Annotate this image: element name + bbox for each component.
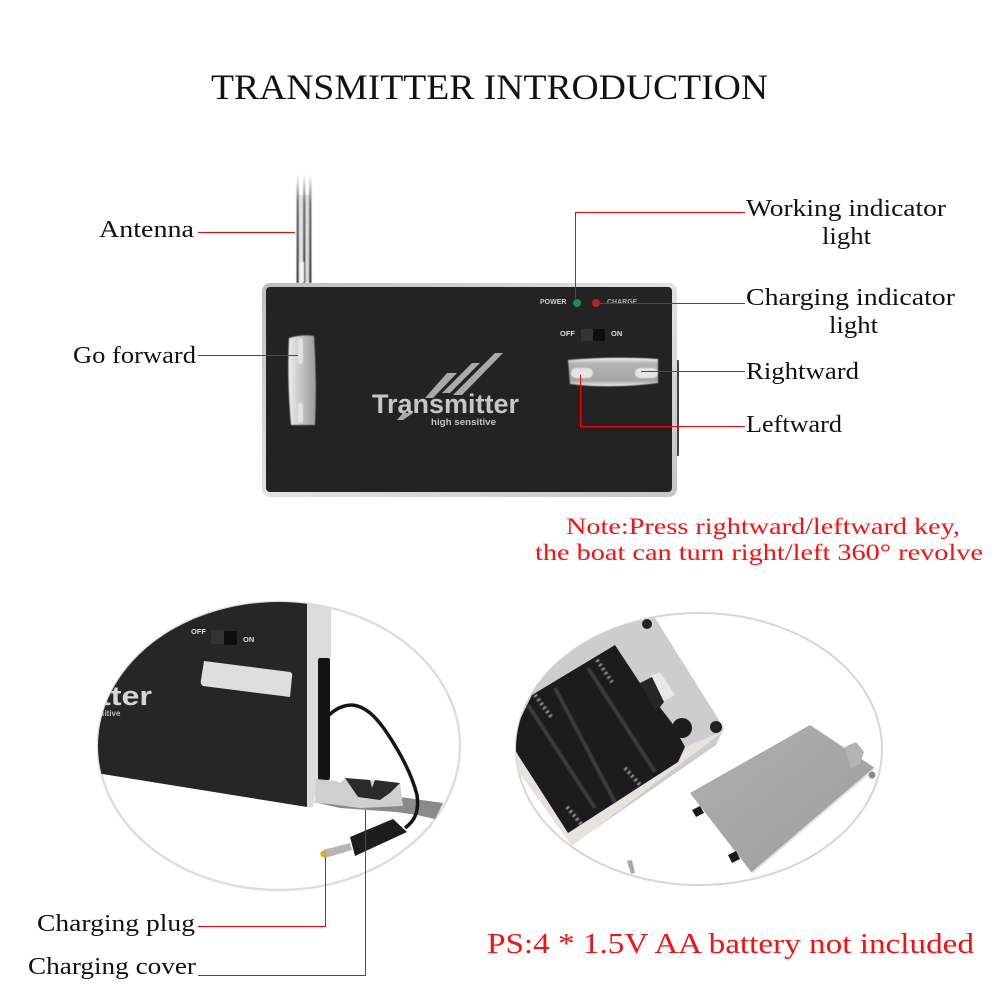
indicator labels: POWER [540, 299, 566, 306]
plug pin [323, 843, 352, 858]
power switch [560, 329, 622, 341]
note: Note:Press rightward/leftward key, [566, 514, 960, 539]
black face [90, 590, 307, 807]
loose screw [627, 860, 635, 874]
bay screw mount [672, 718, 692, 738]
leader line: working light [576, 212, 745, 300]
label: working indicator light [746, 196, 946, 250]
note: the boat can turn right/left 360° revolve [535, 540, 983, 565]
logo stripes [397, 353, 503, 420]
indicator labels [540, 299, 638, 307]
logo fragment: tter [100, 681, 153, 711]
transmitter front view [262, 175, 679, 497]
cover clips [692, 806, 740, 863]
leader line: antenna [198, 232, 295, 234]
side button [675, 360, 679, 456]
label: charging indicator light: Charging indicator [746, 285, 955, 311]
lower edge [510, 731, 724, 846]
battery bay [510, 645, 685, 833]
cover rim [752, 768, 875, 873]
device body [262, 283, 677, 497]
power switch: ON [611, 329, 622, 338]
port cavity [345, 778, 400, 800]
panel: battery compartment detail [510, 613, 882, 885]
port housing [315, 778, 403, 808]
logo subtitle: high sensitive [431, 417, 496, 428]
ellipse outline [98, 602, 460, 890]
label: antenna: Antenna [99, 217, 194, 243]
battery note: PS:4 * 1.5V AA battery not included [487, 929, 974, 960]
switch [640, 677, 664, 712]
leader line: rightward [641, 370, 745, 372]
logo text: Transmitter [372, 389, 519, 419]
label: charging indicator light [746, 285, 955, 339]
logo subtitle fragment: sitive [100, 709, 121, 718]
silver side [307, 600, 331, 807]
note [535, 514, 983, 565]
port plate [313, 797, 443, 819]
spring contacts [535, 660, 640, 825]
label: charging plug: Charging plug [37, 911, 195, 937]
side slot [318, 658, 330, 780]
power switch [191, 629, 254, 645]
plug tip [320, 851, 327, 857]
bay ridges [528, 668, 655, 808]
cable [320, 705, 418, 828]
key [201, 661, 292, 697]
corner screw [710, 721, 722, 733]
left and right key [568, 358, 658, 386]
label: charging indicator light: light [829, 313, 878, 339]
silver back [515, 618, 724, 845]
black face [266, 287, 672, 492]
cover corner pin [868, 772, 876, 778]
panel: charging port detail [90, 590, 460, 890]
top screw [642, 619, 652, 629]
power switch: OFF [191, 627, 206, 636]
plug body [350, 819, 407, 856]
leader line: leftward [580, 375, 745, 426]
label: working indicator light: Working indicator [746, 196, 946, 222]
label: go forward: Go forward [73, 343, 196, 369]
label: rightward: Rightward [746, 359, 859, 385]
antenna [296, 175, 312, 283]
label: charging cover: Charging cover [28, 954, 196, 980]
cover latch [845, 742, 864, 768]
go forward key [288, 335, 316, 425]
leader line: charging plug [198, 857, 326, 926]
leader line: charging light [597, 302, 745, 304]
indicator labels: CHARGE [607, 299, 638, 306]
ellipse outline [516, 613, 882, 885]
label: leftward: Leftward [746, 412, 842, 438]
power switch: OFF [560, 329, 575, 338]
switch window [650, 672, 675, 702]
battery cover [690, 725, 875, 873]
leader line: charging cover [198, 810, 366, 976]
power switch: ON [243, 635, 254, 644]
cropped device view [90, 590, 443, 858]
compartment view [510, 618, 876, 874]
label: working indicator light: light [822, 224, 871, 250]
title: TRANSMITTER INTRODUCTION [211, 67, 768, 107]
leader line: go forward [198, 354, 298, 356]
